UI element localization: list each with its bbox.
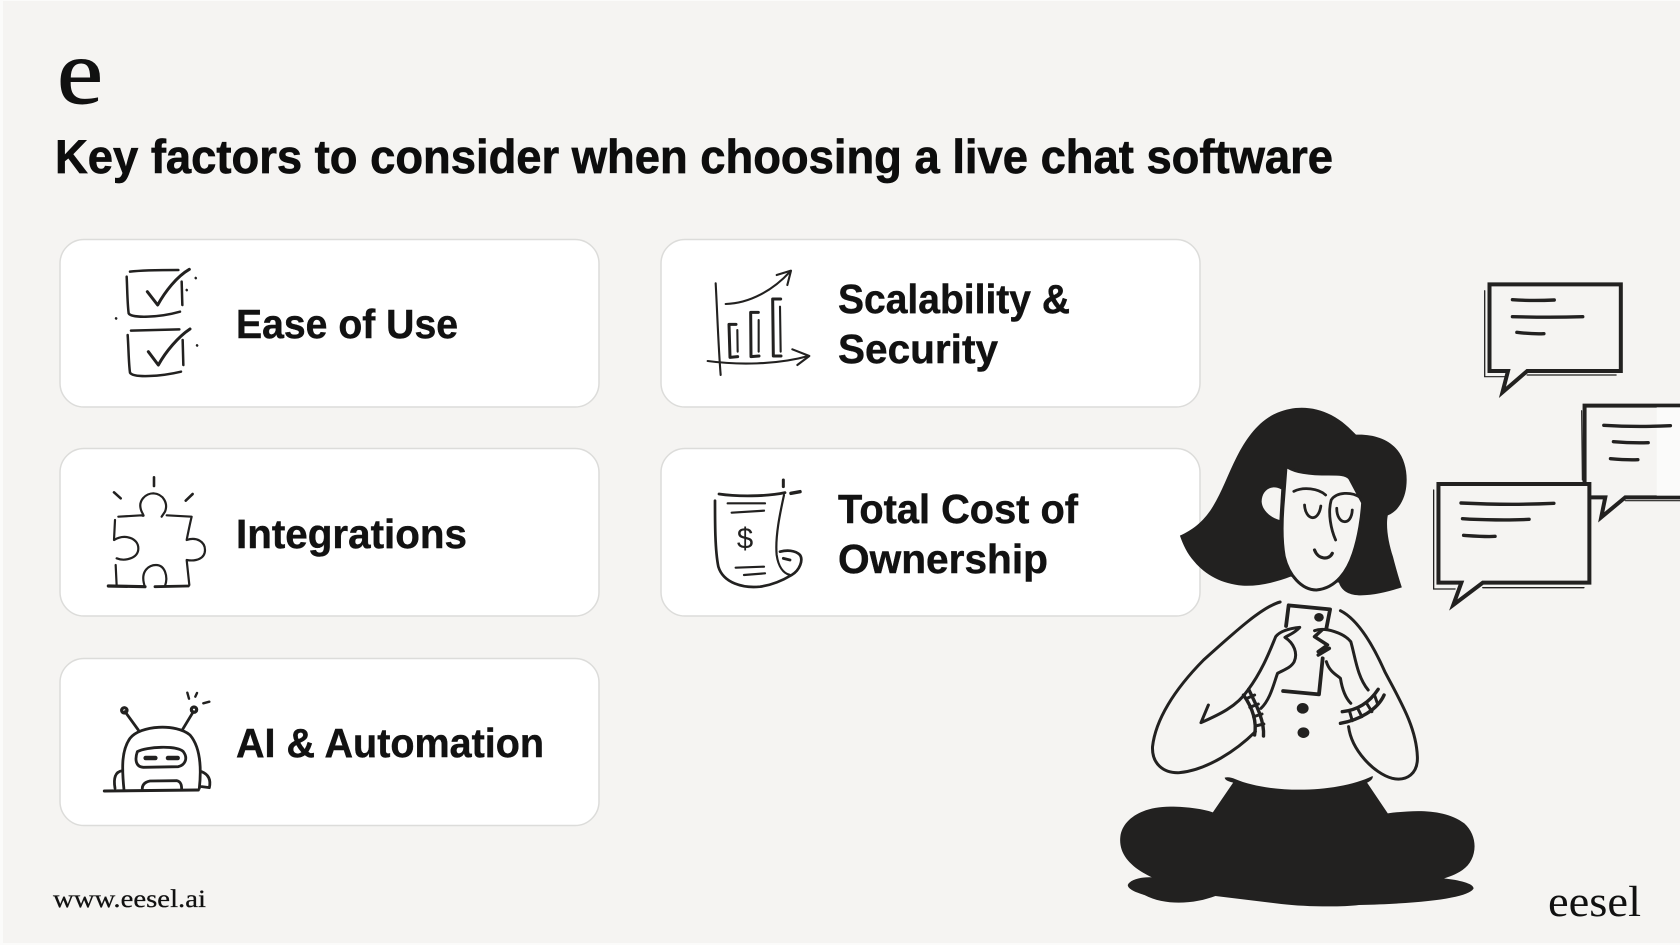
hair and face [1180,408,1407,595]
label: Integrations: Integrations [236,511,467,557]
footer url: www.eesel.ai [53,884,206,913]
label: Ease of Use: Ease of Use [236,301,458,347]
panel: Integrations [60,448,599,616]
icon: invoice scroll: $ [737,523,753,556]
illustration: woman with phone [1120,408,1475,906]
body, arms and phone [1152,602,1417,779]
panel: Scalability & Security [661,240,1200,407]
label: Scalability & Security: Scalability & [838,276,1070,322]
chat bubble: lower [1434,484,1589,605]
label: AI & Automation: AI & Automation [236,720,544,766]
phone camera and shirt buttons [1297,613,1324,738]
label: Scalability & Security [838,276,1070,372]
icon: checklist [116,269,197,376]
icon: puzzle piece [108,477,205,587]
footer wordmark: eesel [1548,879,1641,926]
skirt and crossed legs [1120,776,1475,906]
icon: growth chart [708,271,809,375]
label: Total Cost of Ownership: Total Cost of [838,486,1078,532]
chat bubble: right [1582,406,1680,517]
icon: invoice scroll [715,480,801,587]
label: Total Cost of Ownership: Ownership [838,536,1048,582]
chat bubble: top [1485,284,1621,392]
label: Scalability & Security: Security [838,326,998,372]
icon: robot [104,693,210,791]
label: Total Cost of Ownership [838,486,1078,582]
panel: Total Cost of Ownership [661,448,1200,616]
panel: Ease of Use [60,240,599,407]
panel: AI & Automation [60,658,599,826]
logo: e: e [57,21,103,123]
title: Key factors to consider when choosing a live chat software [55,131,1333,184]
